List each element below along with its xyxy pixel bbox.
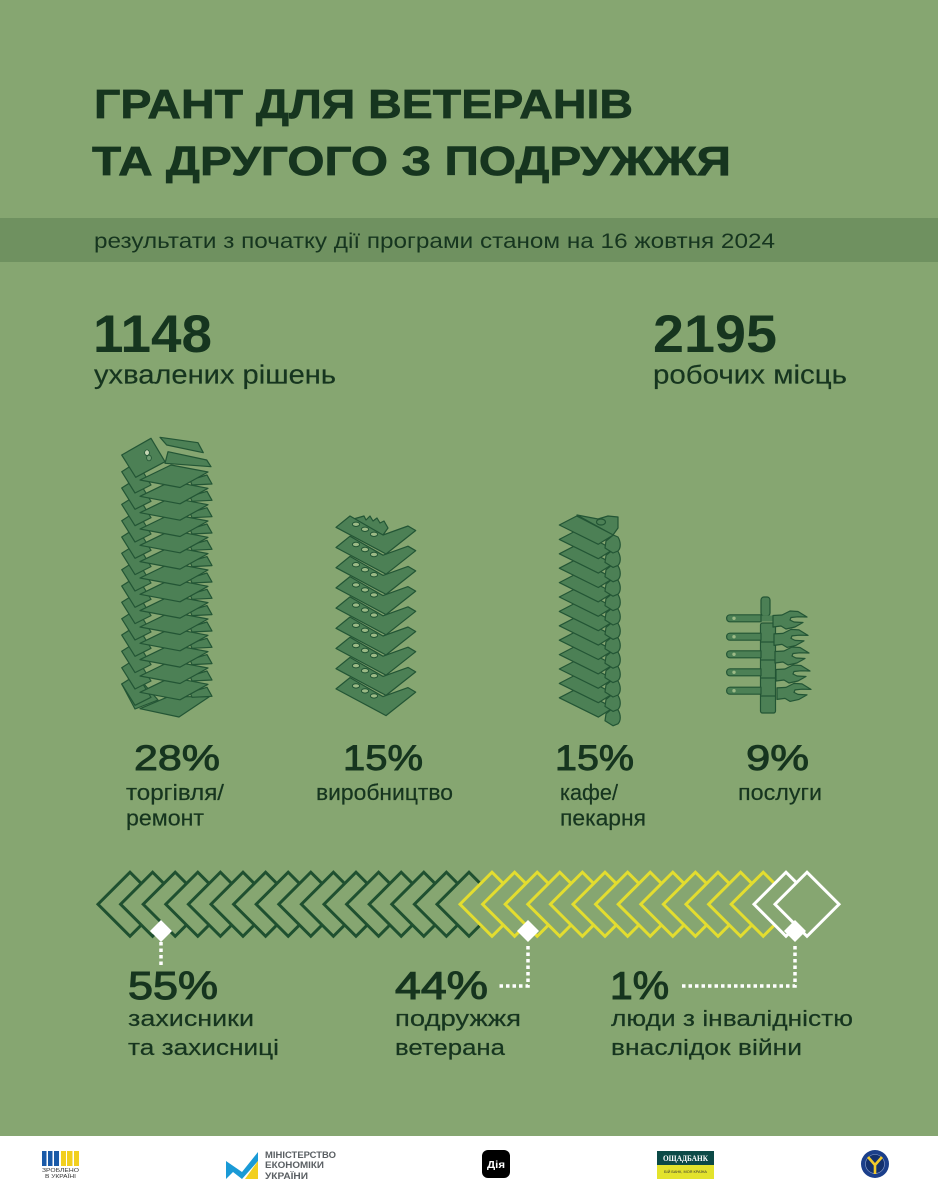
subtitle band <box>0 218 938 262</box>
label: 15% manufacturing: виробництво <box>316 780 453 805</box>
label: 9% services: 9% <box>746 739 809 778</box>
label: 1% people with war disability <box>610 965 853 1060</box>
logo: ministry of economy <box>226 1150 336 1181</box>
label: 55% defenders <box>128 965 279 1060</box>
label: 9% services: послуги <box>738 780 822 805</box>
label: 28% trade and repair: 28% <box>134 739 220 778</box>
chevron bar: defenders 55% <box>98 872 480 936</box>
label: 1% people with war disability: внаслідок війни <box>611 1035 802 1060</box>
title <box>92 81 731 184</box>
logo: ministry of economy: УКРАЇНИ <box>265 1171 308 1181</box>
logo: ministry of economy: МІНІСТЕРСТВО <box>265 1150 336 1160</box>
logo: Diia <box>482 1150 510 1178</box>
label: 28% trade and repair: торгівля/ <box>126 780 225 805</box>
pictogram: trade and repair stack <box>122 437 212 717</box>
footer <box>0 1136 938 1200</box>
label: 9% services <box>738 739 822 805</box>
title: ГРАНТ ДЛЯ ВЕТЕРАНІВ <box>94 81 633 127</box>
logo: ministry of economy: ЕКОНОМІКИ <box>265 1160 324 1170</box>
label: 44% veteran spouses: ветерана <box>395 1035 506 1060</box>
label: 28% trade and repair <box>126 739 225 830</box>
logo: Oschadbank <box>657 1151 714 1179</box>
label: 15% cafe and bakery <box>555 739 646 830</box>
logo: Oschadbank: БІЙ БАНК, МОЯ КРАЇНА <box>664 1169 707 1174</box>
label: 15% cafe and bakery: 15% <box>555 739 634 778</box>
stat: jobs: робочих місць <box>653 362 847 390</box>
label: 44% veteran spouses: 44% <box>395 965 488 1008</box>
label: 15% cafe and bakery: кафе/ <box>560 780 619 805</box>
stat: approved decisions <box>93 305 336 390</box>
label: 44% veteran spouses <box>395 965 521 1060</box>
title: ТА ДРУГОГО З ПОДРУЖЖЯ <box>92 138 731 184</box>
logo: Diia: Дія <box>487 1160 505 1171</box>
label: 15% manufacturing <box>316 739 453 805</box>
label: 1% people with war disability: 1% <box>610 965 669 1008</box>
marker and connector: 1% <box>681 920 806 986</box>
stat: approved decisions: 1148 <box>93 305 212 364</box>
logo: Oschadbank: ОЩАДБАНК <box>663 1154 708 1163</box>
chevron bar: spouses 44% <box>460 872 774 936</box>
label: 1% people with war disability: люди з інвалідністю <box>611 1006 853 1031</box>
label: 55% defenders: та захисниці <box>128 1035 279 1060</box>
pictogram: cafe and bakery stack <box>559 515 620 726</box>
subtitle band: результати з початку дії програми станом на 16 жовтня 2024 <box>94 230 775 253</box>
label: 55% defenders: захисники <box>128 1006 254 1031</box>
marker and connector: 44% <box>497 920 539 986</box>
stat: approved decisions: ухвалених рішень <box>94 362 336 390</box>
pictogram: manufacturing stack <box>336 516 416 716</box>
stat: jobs <box>653 305 847 390</box>
chevron bar: disabled veterans 1% <box>754 872 839 936</box>
logo: made in Ukraine <box>42 1151 80 1180</box>
logo: made in Ukraine: ЗРОБЛЕНО <box>42 1168 80 1174</box>
label: 15% cafe and bakery: пекарня <box>560 806 646 830</box>
marker and connector: 55% <box>150 920 172 966</box>
label: 15% manufacturing: 15% <box>343 739 423 778</box>
pictogram: services wrenches <box>727 597 811 713</box>
label: 44% veteran spouses: подружжя <box>395 1006 521 1031</box>
label: 55% defenders: 55% <box>128 965 218 1008</box>
label: 28% trade and repair: ремонт <box>126 806 204 830</box>
logo: made in Ukraine: В УКРАЇНІ <box>45 1173 77 1180</box>
stat: jobs: 2195 <box>653 305 777 364</box>
logo: employment service emblem <box>861 1150 889 1178</box>
